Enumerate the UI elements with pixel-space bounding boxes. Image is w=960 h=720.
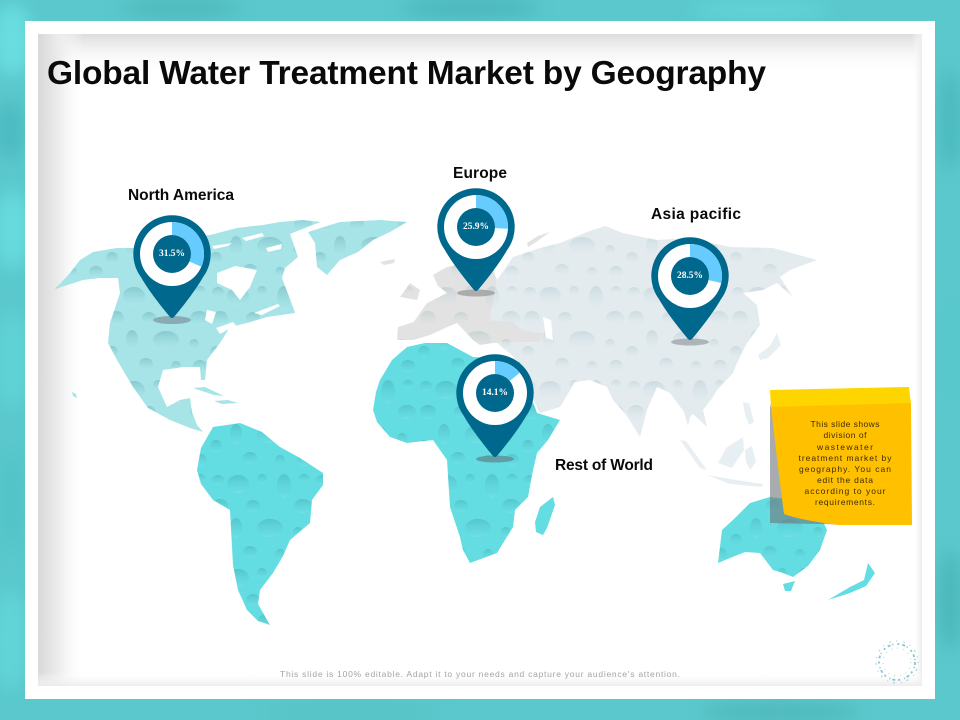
pin: Rest of World 14.1%	[456, 354, 534, 462]
pin: Europe 25.9%: 25.9%	[463, 222, 489, 232]
map region: North America	[55, 220, 407, 432]
callout text: This slide shows	[810, 419, 880, 429]
callout text: geography. You can	[799, 464, 891, 474]
callout text: requirements.	[815, 497, 875, 507]
map region: Europe	[380, 232, 550, 345]
Hudson Bay, Great Lakes and Arctic gaps	[205, 233, 282, 334]
callout text: division of	[824, 430, 867, 440]
pin: Rest of World 14.1%: 14.1%	[482, 388, 508, 398]
sticky note callout	[770, 387, 912, 525]
label: Europe: Europe	[453, 165, 507, 182]
label: Asia pacific: Asia pacific	[651, 206, 741, 223]
callout text: edit the data	[817, 475, 873, 485]
map region: South America	[197, 423, 323, 625]
label: North America: North America	[128, 187, 234, 204]
title: Global Water Treatment Market by Geography	[47, 55, 766, 92]
label: Rest of World: Rest of World	[555, 457, 653, 474]
icon: water splash ring	[876, 641, 918, 683]
map region: Africa	[373, 343, 560, 563]
pin: North America 31.5%: 31.5%	[159, 249, 185, 259]
footer note: This slide is 100% editable. Adapt it to your needs and capture your audience's attention.	[280, 669, 680, 679]
Caspian Sea	[543, 317, 553, 340]
pin: Europe 25.9%	[437, 188, 515, 296]
callout text	[798, 419, 892, 507]
pin: Asia pacific 28.5%: 28.5%	[677, 271, 703, 281]
callout text: treatment market by	[798, 453, 892, 463]
pin: Asia pacific 28.5%	[651, 237, 729, 346]
callout text: wastewater	[816, 442, 873, 452]
map region: Asia	[490, 226, 817, 487]
callout text: according to your	[804, 486, 886, 496]
pin: North America 31.5%	[133, 215, 211, 324]
map region: Australia and New Zealand	[718, 497, 875, 600]
world map	[55, 220, 875, 625]
